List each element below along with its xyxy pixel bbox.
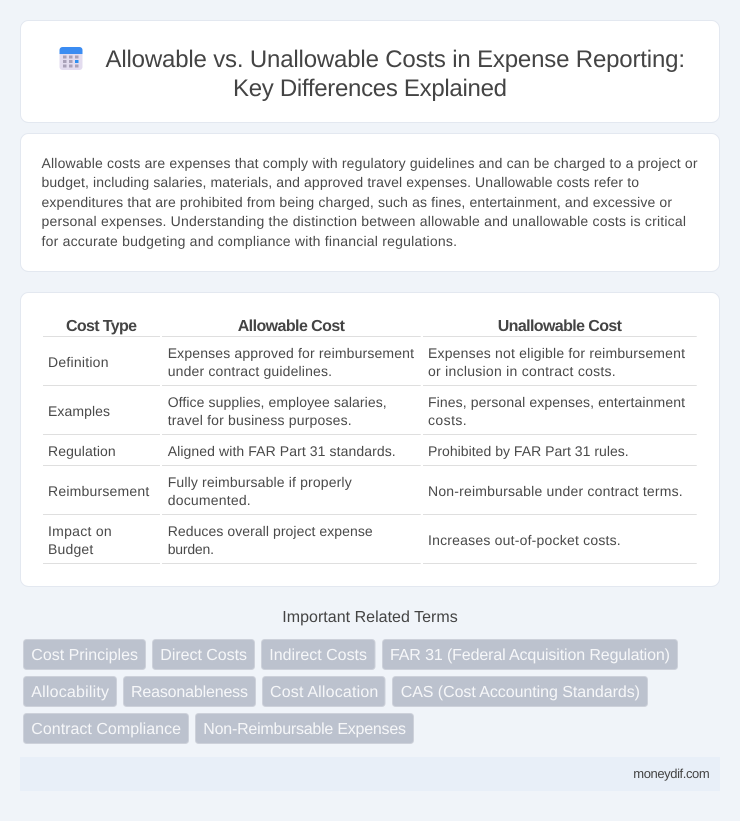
tag: direct costs: [152, 640, 254, 670]
tag: allocability: [24, 676, 116, 706]
tag: non-reimbursable expenses: [196, 714, 414, 744]
tag: contract compliance: Contract Compliance: [31, 721, 181, 738]
tag: reasonableness: [124, 676, 256, 706]
text block: introduction: [42, 155, 698, 249]
row: regulation: [48, 443, 629, 459]
tag group: related terms: [24, 640, 678, 744]
row: examples: Office supplies, employee salaries,: [168, 394, 387, 410]
tag: cost principles: Cost Principles: [31, 647, 138, 664]
row: examples: [48, 394, 685, 428]
table header: [66, 318, 623, 335]
row: regulation: Regulation: [48, 443, 116, 459]
row: examples: travel for business purposes.: [168, 412, 352, 428]
table header: Cost Type: [66, 318, 137, 335]
text block: introduction: Allowable costs are expenses that comply with regulatory guidelines and can be charged to a project or: [42, 155, 698, 171]
tag: contract compliance: [24, 714, 188, 744]
row: regulation: Prohibited by FAR Part 31 rules.: [428, 443, 629, 459]
panel: introduction paragraph: [20, 134, 720, 272]
row: impact on budget: Increases out-of-pocket costs.: [428, 532, 621, 548]
row: examples: Examples: [48, 403, 110, 419]
tag: allocability: Allocability: [31, 684, 109, 701]
tag: cost allocation: Cost Allocation: [270, 684, 378, 701]
row: regulation: Aligned with FAR Part 31 standards.: [168, 443, 396, 459]
row: definition: Definition: [48, 354, 108, 370]
text block: introduction: for accurate budgeting and compliance with financial regulations.: [42, 233, 457, 249]
title: Allowable vs. Unallowable Costs in Expense Reporting:: [106, 46, 685, 73]
tag: cost principles: [24, 640, 146, 670]
text block: introduction: expenditures that are prohibited from being charged, such as fines, entertainment, and excessive or: [42, 194, 672, 210]
footer source: moneydif.com: [633, 766, 710, 781]
tag: indirect costs: Indirect Costs: [269, 647, 367, 664]
row: definition: [48, 345, 685, 379]
row: definition: under contract guidelines.: [168, 363, 332, 379]
row: reimbursement: Reimbursement: [48, 483, 149, 499]
title: Key Differences Explained: [233, 75, 507, 102]
tag: cost allocation: [262, 676, 385, 706]
icon: calendar: [60, 47, 82, 70]
row: examples: Fines, personal expenses, entertainment: [428, 394, 685, 410]
row: reimbursement: Non-reimbursable under contract terms.: [428, 483, 683, 499]
row: impact on budget: Budget: [48, 541, 93, 557]
text block: introduction: personal expenses. Understanding the distinction between allowable and unallowable costs is critical: [42, 213, 686, 229]
tag: direct costs: Direct Costs: [160, 647, 247, 664]
row: impact on budget: Reduces overall project expense: [168, 523, 373, 539]
panel: title card: [20, 20, 720, 122]
tag: indirect costs: [262, 640, 375, 670]
row: reimbursement: Fully reimbursable if properly: [168, 474, 352, 490]
row: definition: Expenses not eligible for reimbursement: [428, 345, 685, 361]
tag: cas: [392, 676, 648, 706]
row: impact on budget: Impact on: [48, 523, 112, 539]
text block: introduction: budget, including salaries, materials, and approved travel expenses. Unallowable costs refer to: [42, 174, 639, 190]
row: definition: or inclusion in contract costs.: [428, 363, 616, 379]
heading: important related terms: Important Related Terms: [282, 609, 458, 626]
row: impact on budget: [48, 523, 621, 557]
tag: cas: CAS (Cost Accounting Standards): [401, 684, 640, 701]
tag: non-reimbursable expenses: Non-Reimbursable Expenses: [203, 721, 406, 738]
title: [106, 46, 685, 102]
tag: far 31: FAR 31 (Federal Acquisition Regulation): [390, 647, 670, 664]
tag: far 31: [382, 640, 678, 670]
row: examples: costs.: [428, 412, 467, 428]
tag: reasonableness: Reasonableness: [131, 684, 248, 701]
table header: Allowable Cost: [238, 318, 346, 335]
row: reimbursement: documented.: [168, 492, 251, 508]
row: definition: Expenses approved for reimbursement: [168, 345, 414, 361]
panel: comparison table: [20, 292, 720, 586]
footer bar: [20, 757, 720, 791]
table header: Unallowable Cost: [498, 318, 623, 335]
row: impact on budget: burden.: [168, 541, 214, 557]
row: reimbursement: [48, 474, 683, 508]
